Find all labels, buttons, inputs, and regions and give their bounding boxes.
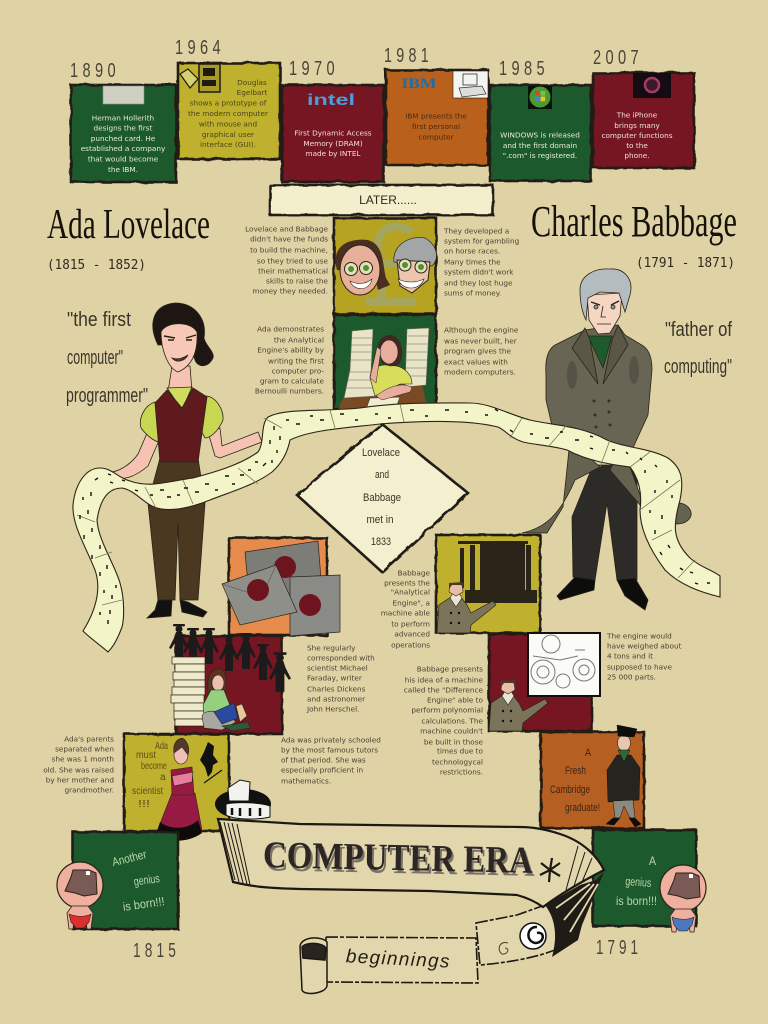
panel: 1981 IBM PC: computer [418,132,454,142]
text: Ada demonstrates: gram to calculate [260,376,324,386]
shoes [557,577,595,600]
illustration: girl reading [202,669,250,731]
text: funds: to build the machine, [250,246,328,254]
panel: Ada is born [73,832,178,929]
text: difference engine: times due to [437,746,484,756]
illustration: girl in red dress [156,738,202,841]
diamond: met in 1833 [297,424,468,572]
text: although: exact values with [444,358,508,366]
quote: the first computer programmer: programmer" [66,385,148,407]
face: Ada [336,240,390,295]
panel: 1964 mouse and GUI: the modern computer [188,109,268,118]
quote: father of computing: "father of [665,319,732,341]
banner lower ribbon [326,905,575,983]
panel: 1890 punched card [71,85,176,182]
character: Ada Lovelace [112,303,262,618]
diamond: met in 1833: Lovelace [362,447,400,459]
panel: Babbage is born [593,830,696,926]
year labels: timeline: 1981 [384,45,433,67]
text: analytical engine: advanced [394,630,430,638]
text: private schooling [281,736,381,786]
handwritten text [132,741,168,810]
beginnings curl [300,938,327,993]
quote: the first computer programmer: "the first [67,309,131,331]
panel: 1964 mouse and GUI: graphical user [202,130,254,139]
panel: 1985 Windows: ".com" is registered. [503,151,577,160]
text: funds: so they tried to use [257,256,329,266]
text: correspondence: She regularly [307,644,356,652]
sleeves [140,402,163,442]
panel: 1964 mouse and GUI: Egelbart [237,88,267,97]
text: Ada demonstrates: the Analytical [274,336,324,344]
diamond: met in 1833: met in [366,514,394,526]
icon: envelope front [222,565,297,625]
logo: IBM: IBM [402,76,436,92]
panel: Ada is born: is born!!! [122,894,165,914]
text: engine weight: supposed to have [607,662,672,672]
title: computer era: COMPUTER ERA [264,837,536,885]
year labels: timeline: 1964 [175,37,225,59]
quote: the first computer programmer [66,309,148,407]
heading: Ada Lovelace: Ada Lovelace [47,202,210,248]
panel: Cambridge graduate [541,725,644,828]
text: although: Although the engine [444,326,519,334]
text: Ada's parents: separated when [55,744,114,754]
text: engine weight: 25 000 parts. [607,672,656,682]
icon: apple image [633,73,671,98]
year: 1815: 1815 [133,940,180,962]
icon: baby Babbage [660,865,706,932]
hair [580,269,631,320]
handwritten text: Ada [155,741,168,752]
handwritten text: Fresh [565,765,586,777]
text: gambling [443,226,519,298]
panel: 1964 mouse and GUI: interface (GUI). [200,140,256,149]
text: although: modern computers. [444,368,516,376]
panel: difference engine [489,633,600,731]
text: Ada demonstrates: Ada demonstrates [257,324,324,334]
text: although: was never built, her [444,336,517,346]
trousers [148,458,205,600]
diamond: met in 1833: 1833 [371,536,391,548]
text: correspondence: corresponded with [307,654,375,662]
panel: 2007 iPhone [593,73,694,168]
text: funds: skills to raise the [266,276,329,286]
year labels: timeline: 1985 [499,58,549,80]
text: analytical engine: to perform [391,620,430,628]
title: computer era: COMPUTER ERA [263,834,534,882]
roll at top [215,780,271,819]
illustration: desk [338,384,428,410]
arms [112,431,160,478]
text: analytical engine: Engine", a [393,598,430,608]
panel: Ada writing the program [334,315,436,410]
handwritten text [550,747,600,814]
text: Ada's parents: she was 1 month [52,754,114,764]
panel: 1981 IBM PC [386,70,488,165]
panel: 1985 Windows: WINDOWS is released [500,130,580,140]
illustration: engine [458,541,537,603]
text: although: program gives the [444,346,512,356]
text: engine weight: The engine would [606,632,672,640]
handwritten text: become [141,761,167,772]
handwritten text: must [136,750,156,761]
icon: pound sign [362,226,416,302]
text: funds [245,224,329,296]
panel: 1890 punched card: the IBM. [108,165,138,174]
panel: Babbage is born: is born!!! [616,894,657,908]
text: Ada demonstrates: computer pro- [272,366,324,376]
text: private schooling: Ada was privately schooled [281,736,381,744]
text: difference engine: his idea of a machine [405,676,484,684]
panel: 1964 mouse and GUI [178,63,280,159]
text: gambling: system didn't work [444,268,514,276]
text: analytical engine: "Analytical [391,588,430,596]
text: difference engine: be built in those [424,738,483,746]
panel: 1964 mouse and GUI: Douglas [237,78,267,87]
text: difference engine: technologycal [432,758,483,766]
quote: the first computer programmer: computer" [67,347,123,369]
panel: 1890 punched card: Herman Hollerith [92,114,154,122]
diaper blue [672,917,694,931]
panel: 1890 punched card: designs the first [94,124,153,132]
handwritten text: Cambridge [550,784,590,796]
face: Babbage [394,237,436,293]
illustration: paper stacks [344,328,429,398]
spiral [520,923,546,949]
text: analytical engine: presents the [384,578,431,588]
panel: 1981 IBM PC: IBM presents the [405,112,467,120]
ribbon fold lines [77,404,695,605]
dates: Babbage: (1791 - 1871) [636,256,735,271]
panel: 1964 mouse and GUI: shows a prototype of [190,98,267,108]
diamond: met in 1833: and [375,469,389,481]
panel: pound and faces [334,218,436,314]
figure: graduate [606,725,641,827]
panel: 1964 mouse and GUI: with mouse and [199,120,257,128]
panel: young Ada reading [169,624,291,734]
panel: analytical engine [436,535,540,633]
text: engine weight: 4 tons and it [607,652,653,660]
text: private schooling: especially proficient in [281,766,363,774]
handwritten text: A [585,747,592,759]
handwritten text: graduate! [565,802,600,814]
text: correspondence: Charles Dickens [307,684,366,694]
panel: 1985 Windows: and the first domain [503,141,577,150]
panel: 1970 DRAM: First Dynamic Access [294,128,372,138]
panel: 2007 iPhone: The iPhone [616,110,658,120]
text: Ada's parents: grandmother. [64,786,114,794]
shirt [588,336,612,368]
coat body [546,325,652,450]
year labels: timeline: 1970 [289,58,339,80]
dark fold [545,872,604,957]
silhouettes of famous tutors [169,624,291,692]
lapels [572,325,628,384]
text: Ada's parents [43,734,114,794]
panel: 2007 iPhone: phone. [624,151,650,160]
handwritten text: scientist [132,786,163,797]
coat buttons and shading [567,356,639,428]
handwritten text: a [160,772,166,783]
icon: envelope back [245,541,322,605]
text: correspondence: John Herschel. [306,704,359,714]
text: engine weight: have weighed about [607,642,682,650]
text: difference engine: calculations. The [421,716,484,726]
dates: Ada: (1815 - 1852) [47,258,146,273]
text: gambling: They developed a [443,226,509,236]
panel: 1985 Windows [490,85,591,181]
panel: Babbage is born: genius [625,874,652,890]
panel: 1890 punched card: established a company [81,144,166,153]
text: funds: money they needed. [252,286,328,296]
text: difference engine: Engine" able to [427,696,484,704]
text: correspondence: and astronomer [307,694,365,704]
diamond: met in 1833: Babbage [363,492,401,504]
icon: Windows logo [528,86,552,109]
banner: computer era beginnings [215,780,604,993]
text: analytical engine: Babbage [398,568,431,578]
panel: 2007 iPhone: to the [626,141,648,150]
coat tail left [522,440,600,533]
text: difference engine [404,664,484,776]
quote: father of computing [664,319,732,378]
panel: 2007 iPhone: computer functions [601,131,673,140]
panel: Ada is born: Another [111,847,148,869]
text: gambling: Many times the [444,258,501,266]
text: Ada's parents: Ada's parents [64,734,114,744]
text: correspondence: scientist Michael [307,664,368,672]
panel: Ada must become a scientist [124,734,229,841]
blouse collar [167,387,192,410]
text: difference engine: machine couldn't [420,726,483,736]
trousers [572,465,637,580]
year labels: timeline: 1890 [70,60,120,82]
text: analytical engine: machine able [381,608,431,618]
text: analytical engine [381,568,431,650]
quote: father of computing: computing" [664,356,732,378]
year labels: timeline: 2007 [593,47,643,69]
text: difference engine: Babbage presents [417,664,483,674]
shoes [147,600,172,618]
panel: 2007 iPhone: brings many [614,121,660,130]
hair [153,303,213,366]
year: 1791: 1791 [596,937,642,959]
ribbon punch holes [80,409,710,624]
illustration: Ada at desk [366,335,412,409]
icon: baby Ada [57,862,103,929]
text: private schooling: by the most famous tutors [281,746,378,754]
text: analytical engine: operations [391,640,430,650]
neck [168,366,192,392]
silhouette: tutor [200,742,218,777]
text: private schooling: mathematics. [281,776,331,786]
figure: Babbage presenting [437,582,496,633]
panel: Babbage is born: A [649,854,656,868]
coat tail right [610,440,691,524]
year labels: timeline [70,37,643,82]
diaper red [69,914,91,928]
text: gambling: and they lost huge [444,278,513,288]
panel: 1970 DRAM: Memory (DRAM) [303,139,363,148]
text: Ada demonstrates: Bernoulli numbers. [255,386,324,396]
banner: LATER: LATER...... [359,193,417,207]
text: gambling: system for gambling [444,236,519,246]
text: Ada demonstrates: writing the first [268,356,324,366]
text: difference engine: called the "Difference [404,686,484,694]
small spiral mark [499,942,508,954]
text: gambling: on horse races. [444,246,500,256]
text: Ada demonstrates: Engine's ability by [257,346,325,354]
character: Charles Babbage [522,269,691,610]
subtitle: beginnings: beginnings [345,946,451,973]
icon: circuit board [199,64,220,92]
vest [155,388,207,462]
text: gambling: sums of money. [444,288,501,298]
text: difference engine: restrictions. [440,768,483,776]
punched paper ribbon [73,403,720,652]
text: funds: didn't have the funds [250,234,328,244]
text: Ada demonstrates [255,324,325,396]
text: although [444,326,519,376]
banner left hatching [220,822,250,885]
decorative flower [540,858,560,882]
text: difference engine: perform polynomial [411,706,483,714]
handwritten text: !!! [138,799,150,810]
panel: 1981 IBM PC: first personal [412,122,460,131]
illustration: stack of books [171,657,205,726]
figure: Babbage presenting [489,680,548,731]
text: funds: their mathematical [258,266,328,276]
image: gears drawing [528,633,600,696]
logo: intel: intel [307,92,355,109]
banner right hatching [566,846,592,890]
icon: computer mouse [180,69,198,88]
panel: 1890 punched card: that would become [88,154,159,164]
face [587,293,622,334]
face [161,324,197,372]
text: correspondence: Faraday, writer [307,674,362,682]
icon: envelope right [290,575,340,636]
text: funds: Lovelace and Babbage [245,224,328,234]
text: Ada's parents: by her mother and [46,776,114,784]
text: correspondence [306,644,375,714]
panel: letters [222,538,340,636]
banner main band [218,819,604,907]
icon: punched card [103,86,144,104]
text: private schooling: of that period. She was [281,756,366,764]
text: Ada's parents: old. She was raised [43,766,114,774]
panel: Ada is born: genius [133,871,161,889]
panel: 1970 DRAM: made by INTEL [305,149,361,158]
panel: 1970 DRAM [282,85,384,182]
panel: 1890 punched card: punched card. He [91,134,156,143]
text: engine weight [606,632,682,682]
icon: personal computer [453,71,488,98]
banner: LATER [270,185,493,215]
